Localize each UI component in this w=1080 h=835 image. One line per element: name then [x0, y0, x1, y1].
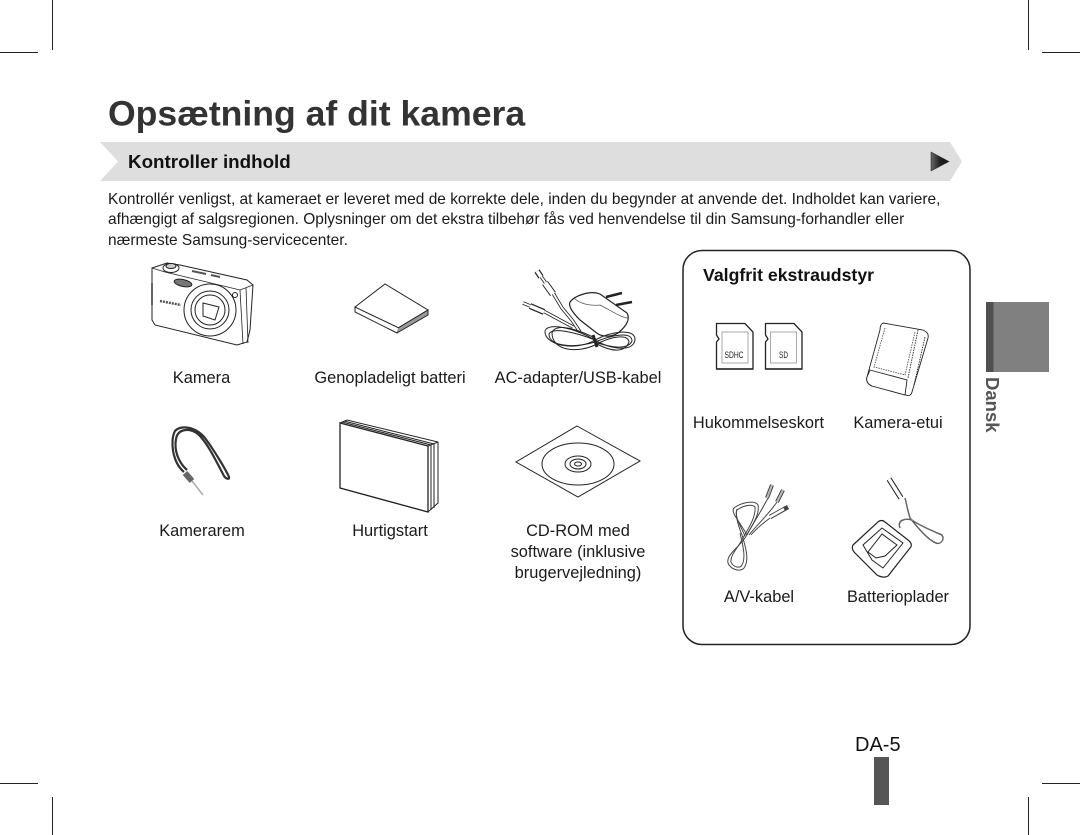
label: CD-ROM med software [511, 522, 645, 582]
label: CD-ROM med software: brugervejledning) [515, 564, 641, 582]
icon: quick start booklet [340, 420, 438, 512]
icon: memory cards: SD [779, 350, 788, 361]
label: CD-ROM med software: CD-ROM med [526, 522, 630, 540]
panel heading: Valgfrit ekstraudstyr [703, 265, 874, 285]
icon: CD-ROM [516, 426, 640, 497]
icon: camera case [867, 323, 928, 396]
intro text: afhængigt af salgsregionen. Oplysninger om det ekstra tilbehør fås ved henvendelse til din Samsung-forhandler eller [108, 211, 904, 228]
label: CD-ROM med software: software (inklusive [511, 543, 645, 561]
language label: Dansk [982, 377, 1003, 433]
section heading bar [100, 142, 962, 181]
intro text: Kontrollér venligst, at kameraet er leveret med de korrekte dele, inden du begynder at anvende det. Indholdet kan variere, [108, 191, 940, 208]
intro text [108, 191, 940, 249]
label: Hukommelseskort: Hukommelseskort [693, 414, 825, 432]
icon: arrow [931, 152, 949, 171]
title: Opsætning af dit kamera [108, 94, 526, 134]
page number: DA-5 [855, 734, 901, 756]
label: A/V-kabel: A/V-kabel [724, 588, 794, 606]
label: Kamera-etui: Kamera-etui [853, 414, 943, 432]
icon: battery [355, 284, 428, 333]
intro text: nærmeste Samsung-servicecenter. [108, 232, 348, 249]
label: AC-adapter/USB-kabel: AC-adapter/USB-kabel [495, 369, 661, 387]
icon: A/V cable [728, 485, 788, 570]
icon: AC adapter and USB cable [523, 271, 635, 350]
label: Batterioplader: Batterioplader [847, 588, 950, 606]
icon: memory cards: SDHC [724, 350, 744, 361]
icon: wrist strap [172, 427, 229, 495]
icon: memory cards [716, 324, 802, 369]
label: Hurtigstart: Hurtigstart [352, 522, 428, 540]
section heading text: Kontroller indhold [128, 151, 291, 172]
icon: battery charger [852, 479, 943, 577]
language tab [982, 302, 1049, 433]
panel: optional accessories [683, 250, 970, 644]
label: Kamerarem: Kamerarem [159, 522, 245, 540]
label: Kamera: Kamera [173, 369, 231, 387]
icon: camera [152, 263, 253, 345]
label: Genopladeligt batteri: Genopladeligt batteri [314, 369, 466, 387]
page marker block [874, 757, 889, 805]
